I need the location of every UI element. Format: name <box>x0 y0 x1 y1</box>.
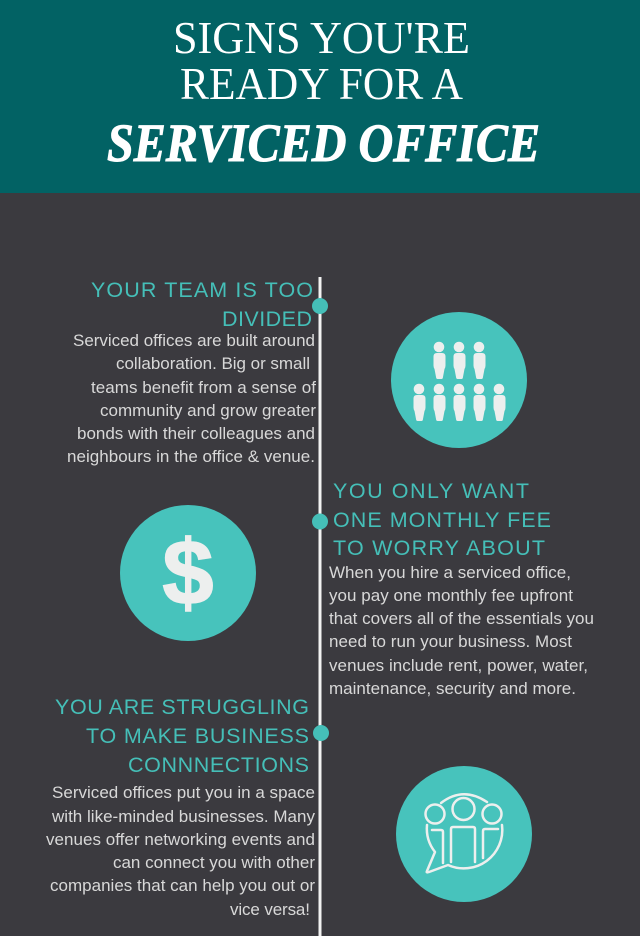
body text: bonds with their colleagues and <box>77 424 315 443</box>
body text: venues include rent, power, water, <box>329 656 588 675</box>
icon: dollar sign: $ <box>162 522 214 624</box>
body text: collaboration. Big or small <box>116 354 310 373</box>
body text: venues offer networking events and <box>46 830 315 849</box>
title: SERVICED OFFICE <box>107 113 540 173</box>
body text <box>329 563 594 698</box>
body text: you pay one monthly fee upfront <box>329 586 573 605</box>
body text: teams benefit from a sense of <box>91 378 316 397</box>
body text <box>46 783 316 919</box>
heading <box>333 479 551 560</box>
body text <box>67 331 316 466</box>
heading: YOU ARE STRUGGLING <box>55 695 309 719</box>
body text: community and grow greater <box>100 401 316 420</box>
panel: business connections <box>46 695 316 919</box>
body text: Serviced offices are built around <box>73 331 315 350</box>
body text: that covers all of the essentials you <box>329 609 594 628</box>
title: SIGNS YOU'RE <box>173 12 470 63</box>
heading: YOUR TEAM IS TOO <box>91 278 313 302</box>
body text: Serviced offices put you in a space <box>52 783 315 802</box>
body text: maintenance, security and more. <box>329 679 576 698</box>
heading: DIVIDED <box>222 307 312 331</box>
heading: TO MAKE BUSINESS <box>86 724 309 748</box>
body text: companies that can help you out or <box>50 876 315 895</box>
heading: TO WORRY ABOUT <box>333 536 545 560</box>
title <box>107 12 540 173</box>
body text: neighbours in the office & venue. <box>67 447 315 466</box>
heading: CONNNECTIONS <box>128 753 309 777</box>
body text: When you hire a serviced office, <box>329 563 571 582</box>
heading: YOU ONLY WANT <box>333 479 529 503</box>
heading <box>91 278 313 331</box>
icon: team of people <box>391 312 527 448</box>
title: READY FOR A <box>180 58 463 109</box>
body text: with like-minded businesses. Many <box>51 807 316 826</box>
body text: vice versa! <box>230 900 310 919</box>
header banner <box>0 0 640 193</box>
heading <box>55 695 309 777</box>
timeline <box>312 277 329 936</box>
heading: ONE MONTHLY FEE <box>333 508 551 532</box>
body text: can connect you with other <box>113 853 315 872</box>
icon: dollar sign <box>120 505 256 641</box>
panel: one monthly fee <box>329 479 594 698</box>
panel: team too divided <box>67 278 316 466</box>
body text: need to run your business. Most <box>329 632 572 651</box>
icon: networking speech bubble <box>396 766 532 902</box>
